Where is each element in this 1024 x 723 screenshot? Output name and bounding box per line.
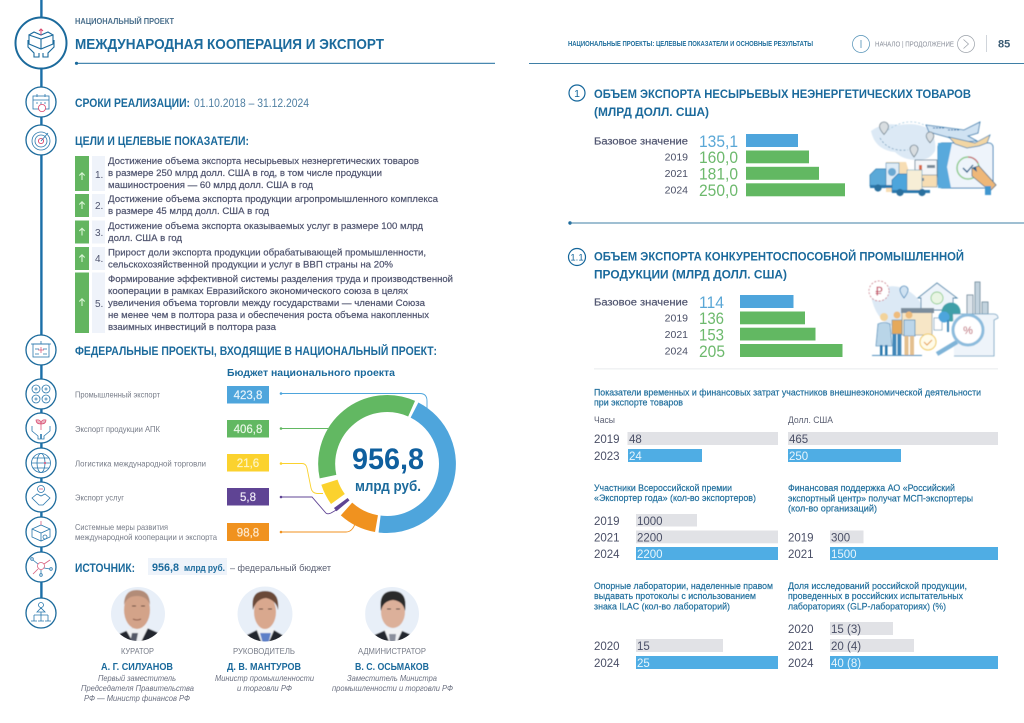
section divider xyxy=(568,221,1024,225)
bar chart: 114 xyxy=(699,294,724,312)
bar chart xyxy=(594,133,845,200)
chart: hours xyxy=(594,415,778,463)
person: curator xyxy=(81,586,194,703)
illustration: logistics xyxy=(870,122,996,196)
chart: 2019 xyxy=(788,532,814,544)
bar chart xyxy=(594,294,842,361)
goal 5: 5. xyxy=(95,299,103,310)
icon: hands holding box xyxy=(16,18,66,68)
bar chart: 2021 xyxy=(665,329,688,341)
icon: hands with plant xyxy=(26,413,56,443)
bar chart: 160,0 xyxy=(699,149,738,167)
icon: presentation board xyxy=(26,335,56,365)
source xyxy=(75,558,332,575)
goal 3 xyxy=(75,220,424,244)
person: head xyxy=(215,586,314,693)
person: administrator: Заместитель Министра xyxy=(347,673,437,683)
row: system measures xyxy=(75,523,269,542)
goal 1 xyxy=(75,156,419,191)
kicker: НАЦИОНАЛЬНЫЙ ПРОЕКТ xyxy=(75,17,174,26)
goal 4 xyxy=(75,247,426,270)
chart: 25 xyxy=(637,658,650,670)
budget heading: Бюджет национального проекта xyxy=(227,367,395,379)
description: при экспорте товаров xyxy=(594,398,683,408)
chart xyxy=(594,639,778,670)
row: industrial export: Промышленный экспорт xyxy=(75,390,160,400)
icon: handshake xyxy=(26,482,56,512)
row: system measures: Системные меры развития xyxy=(75,523,168,532)
bar chart: 2021 xyxy=(665,168,688,180)
icon: network xyxy=(26,552,56,582)
chart: 20 (4) xyxy=(831,641,861,653)
description: Показатели временных и финансовых затрат участников внешнеэкономической деятельности xyxy=(594,388,981,398)
chart: dollars: 250 xyxy=(789,451,808,463)
connector lines xyxy=(280,392,427,533)
portrait xyxy=(365,587,419,641)
goal 5: кооперации в рамках Евразийского экономического союза в целях xyxy=(108,286,408,296)
number badge: 1 xyxy=(574,88,580,100)
chart: 1000 xyxy=(637,516,663,528)
title: МЕЖДУНАРОДНАЯ КООПЕРАЦИЯ И ЭКСПОРТ xyxy=(75,36,384,53)
implementation period: 01.10.2018 – 31.12.2024 xyxy=(194,98,310,110)
chart: 2200 xyxy=(637,549,663,561)
goals list xyxy=(75,156,453,333)
bar chart: 2024 xyxy=(665,346,688,358)
section 1: non-resource exports xyxy=(569,85,996,200)
chart: 2021 xyxy=(594,532,620,544)
block: ILAC laboratories: выдавать протоколы с использованием xyxy=(594,591,756,601)
person: administrator: В. С. ОСЬМАКОВ xyxy=(355,662,429,673)
icon: target xyxy=(26,125,56,155)
chart: hours: 2019 xyxy=(594,434,620,446)
block: GLP laboratories: лабораториях (GLP-лабораториях) (%) xyxy=(788,602,946,612)
chart xyxy=(788,622,998,670)
bar chart: 135,1 xyxy=(699,133,738,151)
row: industrial export xyxy=(75,386,269,404)
goal 1: 1. xyxy=(95,170,103,181)
block: ILAC laboratories: знака ILAC (кол-во лабораторий) xyxy=(594,602,730,612)
segment: industrial export xyxy=(380,410,447,524)
person: curator: Первый заместитель xyxy=(98,673,176,683)
goal 2 xyxy=(75,194,439,217)
chart: 2024 xyxy=(594,658,620,670)
goal 5: не менее чем в полтора раза и обеспечения роста объема накопленных xyxy=(108,310,429,320)
goal 3: Достижение объема экспорта оказываемых услуг в размере 100 млрд xyxy=(108,221,424,231)
right page header: НАЧАЛО | ПРОДОЛЖЕНИЕ xyxy=(875,42,954,48)
goal 3: долл. США в год xyxy=(108,233,183,243)
source: млрд руб. xyxy=(184,563,225,574)
goals heading: ЦЕЛИ И ЦЕЛЕВЫЕ ПОКАЗАТЕЛИ: xyxy=(75,136,249,148)
goal 2: Достижение объема экспорта продукции агропромышленного комплекса xyxy=(108,194,439,204)
bar chart: 2024 xyxy=(665,184,688,196)
donut total: 956,8 xyxy=(352,443,424,476)
budget rows xyxy=(75,386,269,542)
goal 5 xyxy=(75,272,453,333)
block: REC financial support: экспортный центр» получат МСП-экспортеры xyxy=(788,494,973,504)
segment: services xyxy=(341,503,343,506)
block: REC financial support: (кол-во организаций) xyxy=(788,504,877,514)
donut total: млрд руб. xyxy=(355,479,421,495)
bar chart: 136 xyxy=(699,310,724,328)
person: curator: А. Г. СИЛУАНОВ xyxy=(101,662,173,673)
chart: hours: 48 xyxy=(629,434,642,446)
row: logistics: 21,6 xyxy=(237,458,259,470)
row: logistics xyxy=(75,454,269,472)
right page header: 85 xyxy=(998,38,1010,50)
block: exporter of the year: Участники Всероссийской премии xyxy=(594,483,732,493)
goal 4: сельскохозяйственной продукции и услуг в ВВП страны на 20% xyxy=(108,260,393,270)
chart: hours: 2023 xyxy=(594,451,620,463)
chart: 2020 xyxy=(594,641,620,653)
person: head: РУКОВОДИТЕЛЬ xyxy=(233,647,295,656)
block: GLP laboratories: проведенных в российских испытательных xyxy=(788,591,963,601)
block: exporter of the year: «Экспортер года» (кол-во экспортеров) xyxy=(594,493,756,503)
segment: system measures xyxy=(346,509,376,524)
row: agro export: 406,8 xyxy=(234,424,262,436)
chart: 2024 xyxy=(788,658,814,670)
timeline with icons xyxy=(16,0,66,628)
chart: 2019 xyxy=(594,516,620,528)
row: services export: 5,8 xyxy=(240,492,256,504)
chart: hours: Часы xyxy=(594,415,615,425)
person: administrator xyxy=(332,586,453,693)
section 1.1: competitive industrial products xyxy=(568,248,998,369)
block: ILAC laboratories xyxy=(594,581,778,670)
heading: (МЛРД ДОЛЛ. США) xyxy=(594,105,709,119)
segment: agro xyxy=(327,404,412,477)
heading xyxy=(594,248,964,282)
source: ИСТОЧНИК: xyxy=(75,563,135,575)
row: services export xyxy=(75,488,269,506)
bar chart: Базовое значение xyxy=(594,298,688,308)
chart: 2200 xyxy=(637,532,663,544)
implementation period: СРОКИ РЕАЛИЗАЦИИ: xyxy=(75,98,190,110)
person: curator: КУРАТОР xyxy=(121,647,154,656)
person: curator: Председателя Правительства xyxy=(81,683,194,693)
goal 3: 3. xyxy=(95,228,103,239)
source: – федеральный бюджет xyxy=(230,563,332,574)
chart: 1500 xyxy=(831,549,857,561)
donut total xyxy=(352,443,424,495)
person: head: и торговли РФ xyxy=(237,683,292,693)
chart: dollars xyxy=(788,415,998,463)
description xyxy=(594,388,981,408)
illustration: industry and people xyxy=(869,281,998,356)
block: REC financial support: Финансовая поддержка АО «Российский xyxy=(788,483,955,493)
row: logistics: Логистика международной торговли xyxy=(75,460,206,468)
goal 2: 2. xyxy=(95,201,103,212)
chart: dollars: Долл. США xyxy=(788,415,833,425)
bar chart: Базовое значение xyxy=(594,136,688,148)
number badge xyxy=(569,85,585,101)
bar chart: 250,0 xyxy=(699,182,738,200)
icon: hierarchy xyxy=(26,598,56,628)
chart: 2024 xyxy=(594,549,620,561)
bar chart: 205 xyxy=(699,343,725,361)
goal 1: Достижение объема экспорта несырьевых незнергетических товаров xyxy=(108,156,419,166)
row: system measures: 98,8 xyxy=(237,528,259,540)
block: time and cost indicators xyxy=(594,388,998,463)
heading: ОБЪЕМ ЭКСПОРТА КОНКУРЕНТОСПОСОБНОЙ ПРОМЫШЛЕННОЙ xyxy=(594,248,964,264)
block: GLP laboratories xyxy=(788,581,998,670)
left page header xyxy=(75,17,495,65)
person: administrator: АДМИНИСТРАТОР xyxy=(358,647,426,656)
icon: globe xyxy=(26,448,56,478)
illustration: industry and people: ₽ xyxy=(875,284,883,298)
goal 5: увеличения объема торговли между государствами — членами Союза xyxy=(108,298,426,308)
row: services export: Экспорт услуг xyxy=(75,494,124,502)
person: administrator: промышленности и торговли РФ xyxy=(332,683,453,693)
chart xyxy=(594,514,778,561)
number badge xyxy=(568,248,586,266)
heading: ОБЪЕМ ЭКСПОРТА НЕСЫРЬЕВЫХ НЕЭНЕРГЕТИЧЕСКИХ ТОВАРОВ xyxy=(594,87,971,101)
block: REC financial support xyxy=(788,483,998,561)
goal 5: Формирование эффективной системы разделения труда и производственной xyxy=(108,274,453,284)
portrait xyxy=(111,587,165,641)
chart: 15 xyxy=(637,641,650,653)
goal 1: в размере 250 млрд долл. США в год, в том числе продукции xyxy=(108,168,382,178)
chart: 15 (3) xyxy=(831,624,861,636)
chart: dollars: 465 xyxy=(789,434,808,446)
goal 1: машиностроения — 60 млрд долл. США в год xyxy=(108,180,314,190)
portrait xyxy=(237,586,293,646)
source: 956,8 xyxy=(152,562,179,574)
block: GLP laboratories: Доля исследований российской продукции, xyxy=(788,581,967,591)
row: system measures: международной кооперации и экспорта xyxy=(75,533,217,542)
bar chart: 153 xyxy=(699,326,724,344)
right page header: НАЦИОНАЛЬНЫЕ ПРОЕКТЫ: ЦЕЛЕВЫЕ ПОКАЗАТЕЛИ И ОСНОВНЫЕ РЕЗУЛЬТАТЫ xyxy=(568,39,813,48)
bar chart: 181,0 xyxy=(699,166,738,184)
chart: 300 xyxy=(831,532,850,544)
chart xyxy=(788,530,998,561)
bar chart: 2019 xyxy=(665,312,688,324)
person: curator: РФ — Министр финансов РФ xyxy=(84,693,190,703)
goal 4: Прирост доли экспорта продукции обрабатывающей промышленности, xyxy=(108,248,426,258)
illustration: industry and people: % xyxy=(963,325,973,337)
chart: 2021 xyxy=(788,549,814,561)
icon: calendar xyxy=(26,87,56,117)
row: industrial export: 423,8 xyxy=(234,390,262,402)
block: exporter of the year xyxy=(594,483,778,561)
goal 5: взаимных инвестиций в полтора раза xyxy=(108,322,277,332)
row: agro export xyxy=(75,420,269,438)
goal 4: 4. xyxy=(95,254,103,265)
federal projects heading: ФЕДЕРАЛЬНЫЕ ПРОЕКТЫ, ВХОДЯЩИЕ В НАЦИОНАЛЬНЫЙ ПРОЕКТ: xyxy=(75,345,437,358)
goal 2: в размере 45 млрд долл. США в год xyxy=(108,206,270,216)
heading xyxy=(594,87,971,119)
block: ILAC laboratories: Опорные лаборатории, наделенные правом xyxy=(594,581,773,591)
chart: 40 (8) xyxy=(831,658,861,670)
donut chart xyxy=(327,404,447,524)
implementation period xyxy=(75,98,310,110)
number badge: 1.1 xyxy=(570,252,584,264)
chart: hours: 24 xyxy=(629,451,642,463)
heading: ПРОДУКЦИИ (МЛРД ДОЛЛ. США) xyxy=(594,268,787,282)
bar chart: 2019 xyxy=(665,152,688,164)
right page header xyxy=(529,35,1024,64)
icon: gears xyxy=(26,379,56,409)
chart: 2020 xyxy=(788,624,814,636)
row: agro export: Экспорт продукции АПК xyxy=(75,425,160,434)
segment: logistics xyxy=(329,482,338,499)
person: head: Министр промышленности xyxy=(215,673,314,683)
icon: box xyxy=(26,517,56,547)
person: head: Д. В. МАНТУРОВ xyxy=(227,662,301,673)
chart: 2021 xyxy=(788,641,814,653)
